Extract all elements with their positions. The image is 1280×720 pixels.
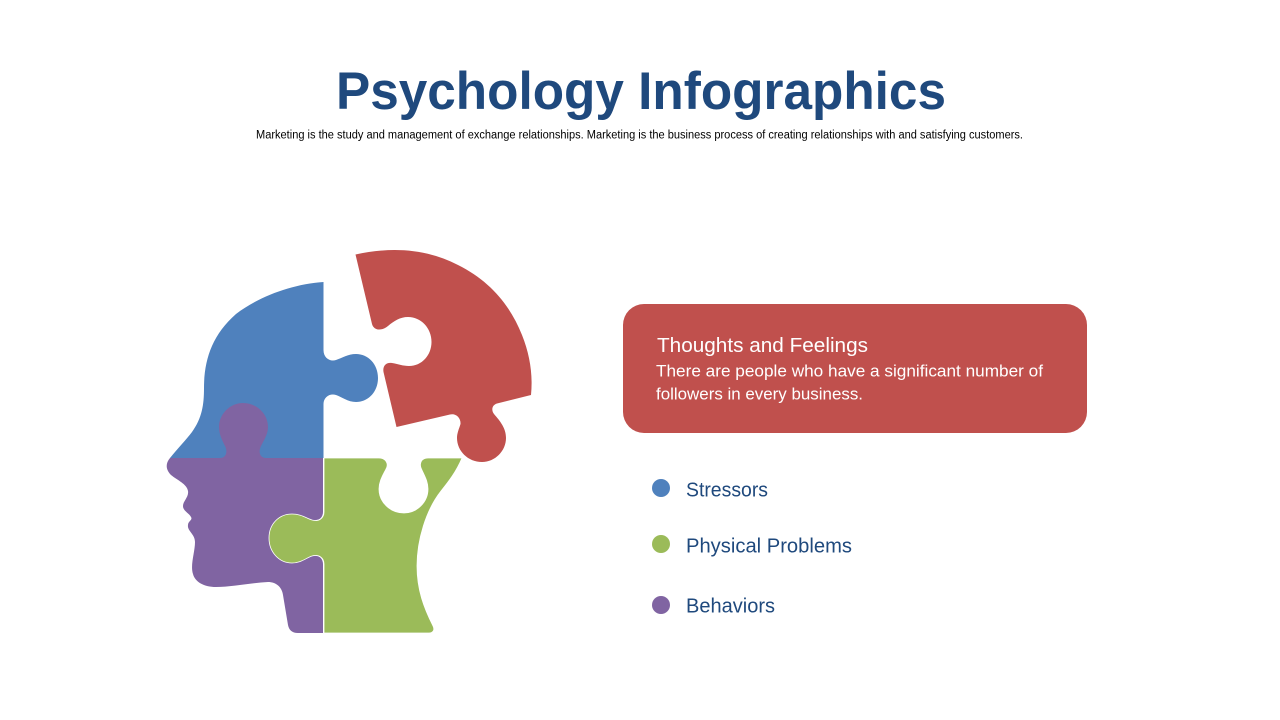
callout background xyxy=(623,304,1087,433)
legend item: physical problems: Physical Problems xyxy=(686,534,852,558)
puzzle head illustration xyxy=(167,250,532,633)
callout heading: Thoughts and Feelings xyxy=(657,334,868,357)
puzzle piece: green neck xyxy=(269,458,462,633)
legend item: stressors: Stressors xyxy=(686,478,768,502)
callout body text xyxy=(656,362,1043,404)
title: Psychology Infographics xyxy=(336,62,946,121)
puzzle piece: purple face xyxy=(167,403,323,633)
legend xyxy=(652,478,852,618)
puzzle piece: red detached xyxy=(356,250,532,462)
subtitle text: Marketing is the study and management of exchange relationships. Marketing is the business process of creating relationships with and satisfying customers. xyxy=(256,130,1023,142)
callout body text: followers in every business. xyxy=(656,384,863,404)
legend item: stressors xyxy=(652,478,768,502)
callout: thoughts and feelings xyxy=(623,304,1087,433)
puzzle piece: blue crown xyxy=(170,282,378,458)
legend item: behaviors: Behaviors xyxy=(686,594,775,618)
callout body text: There are people who have a significant number of xyxy=(656,362,1043,380)
